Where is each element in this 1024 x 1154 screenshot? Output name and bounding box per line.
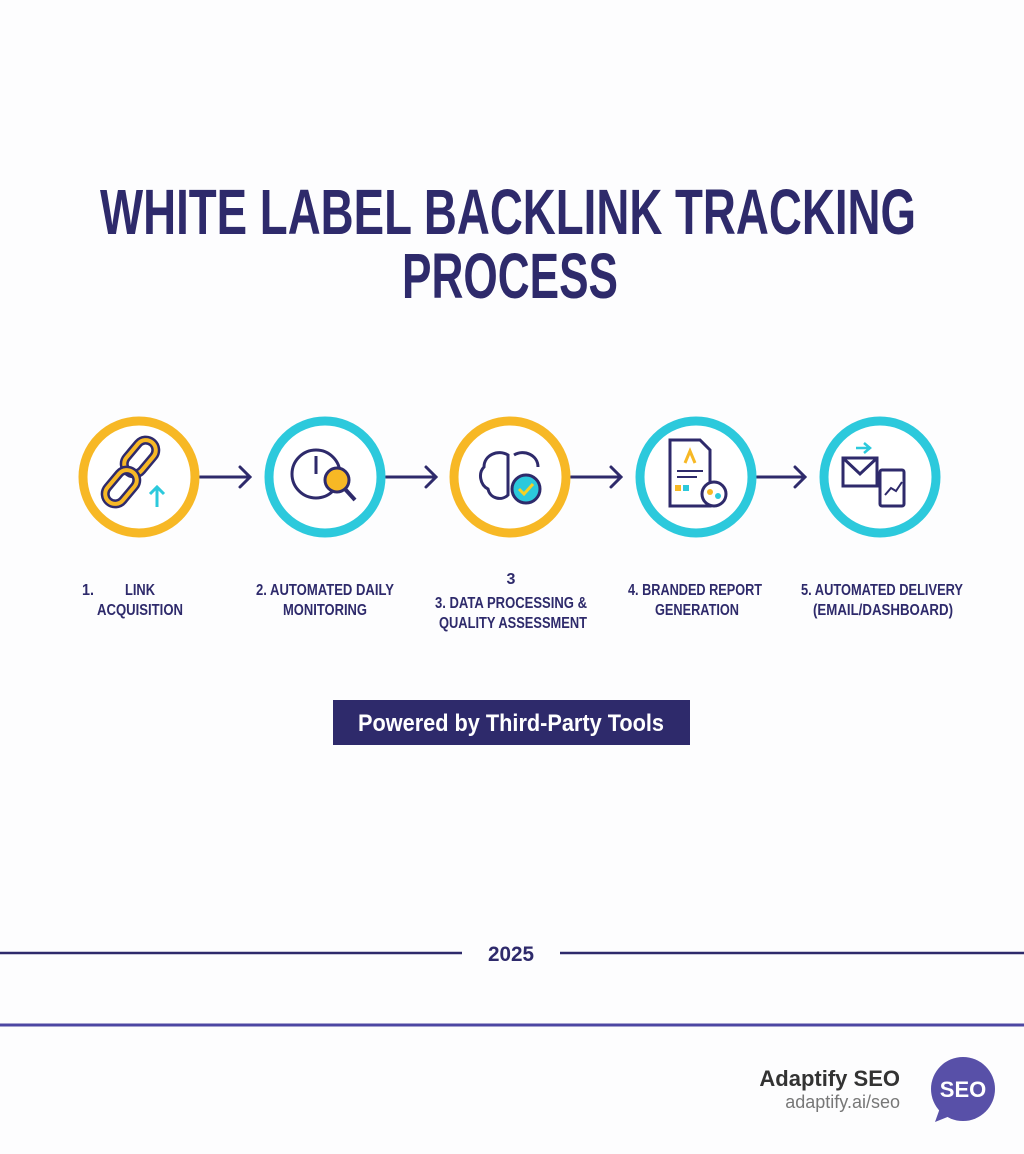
step labels: GENERATION bbox=[655, 602, 739, 619]
step labels: MONITORING bbox=[283, 602, 367, 619]
title: PROCESS bbox=[402, 240, 618, 312]
step labels: (EMAIL/DASHBOARD) bbox=[813, 602, 953, 619]
banner: powered by bbox=[333, 700, 690, 745]
step 4 icon: branded report bbox=[640, 421, 752, 533]
step labels: ACQUISITION bbox=[97, 602, 183, 619]
step labels: 3. DATA PROCESSING & bbox=[435, 595, 587, 612]
step labels: QUALITY ASSESSMENT bbox=[439, 615, 587, 632]
footer brand text: adaptify.ai/seo bbox=[785, 1092, 900, 1112]
step labels: 1. bbox=[82, 582, 94, 599]
step 2 icon: clock with magnifier bbox=[269, 421, 381, 533]
logo: SEO bubble bbox=[931, 1057, 995, 1122]
logo: SEO bubble: SEO bbox=[940, 1077, 986, 1102]
step 5 icon: email and dashboard bbox=[824, 421, 936, 533]
footer brand text: Adaptify SEO bbox=[759, 1066, 900, 1091]
title bbox=[100, 176, 916, 312]
banner: powered by: Powered by Third-Party Tools bbox=[358, 710, 664, 737]
step labels bbox=[82, 571, 963, 632]
step labels: 4. BRANDED REPORT bbox=[628, 582, 762, 599]
footer brand text bbox=[759, 1066, 900, 1112]
arrows between steps bbox=[200, 467, 805, 487]
step 3 icon: brain with check bbox=[454, 421, 566, 533]
step labels: 5. AUTOMATED DELIVERY bbox=[801, 582, 963, 599]
year divider: 2025 bbox=[488, 943, 534, 966]
step labels: 2. AUTOMATED DAILY bbox=[256, 582, 394, 599]
step labels: LINK bbox=[125, 582, 155, 599]
step 1 icon: chain link bbox=[83, 421, 195, 533]
step labels: 3 bbox=[507, 571, 516, 588]
